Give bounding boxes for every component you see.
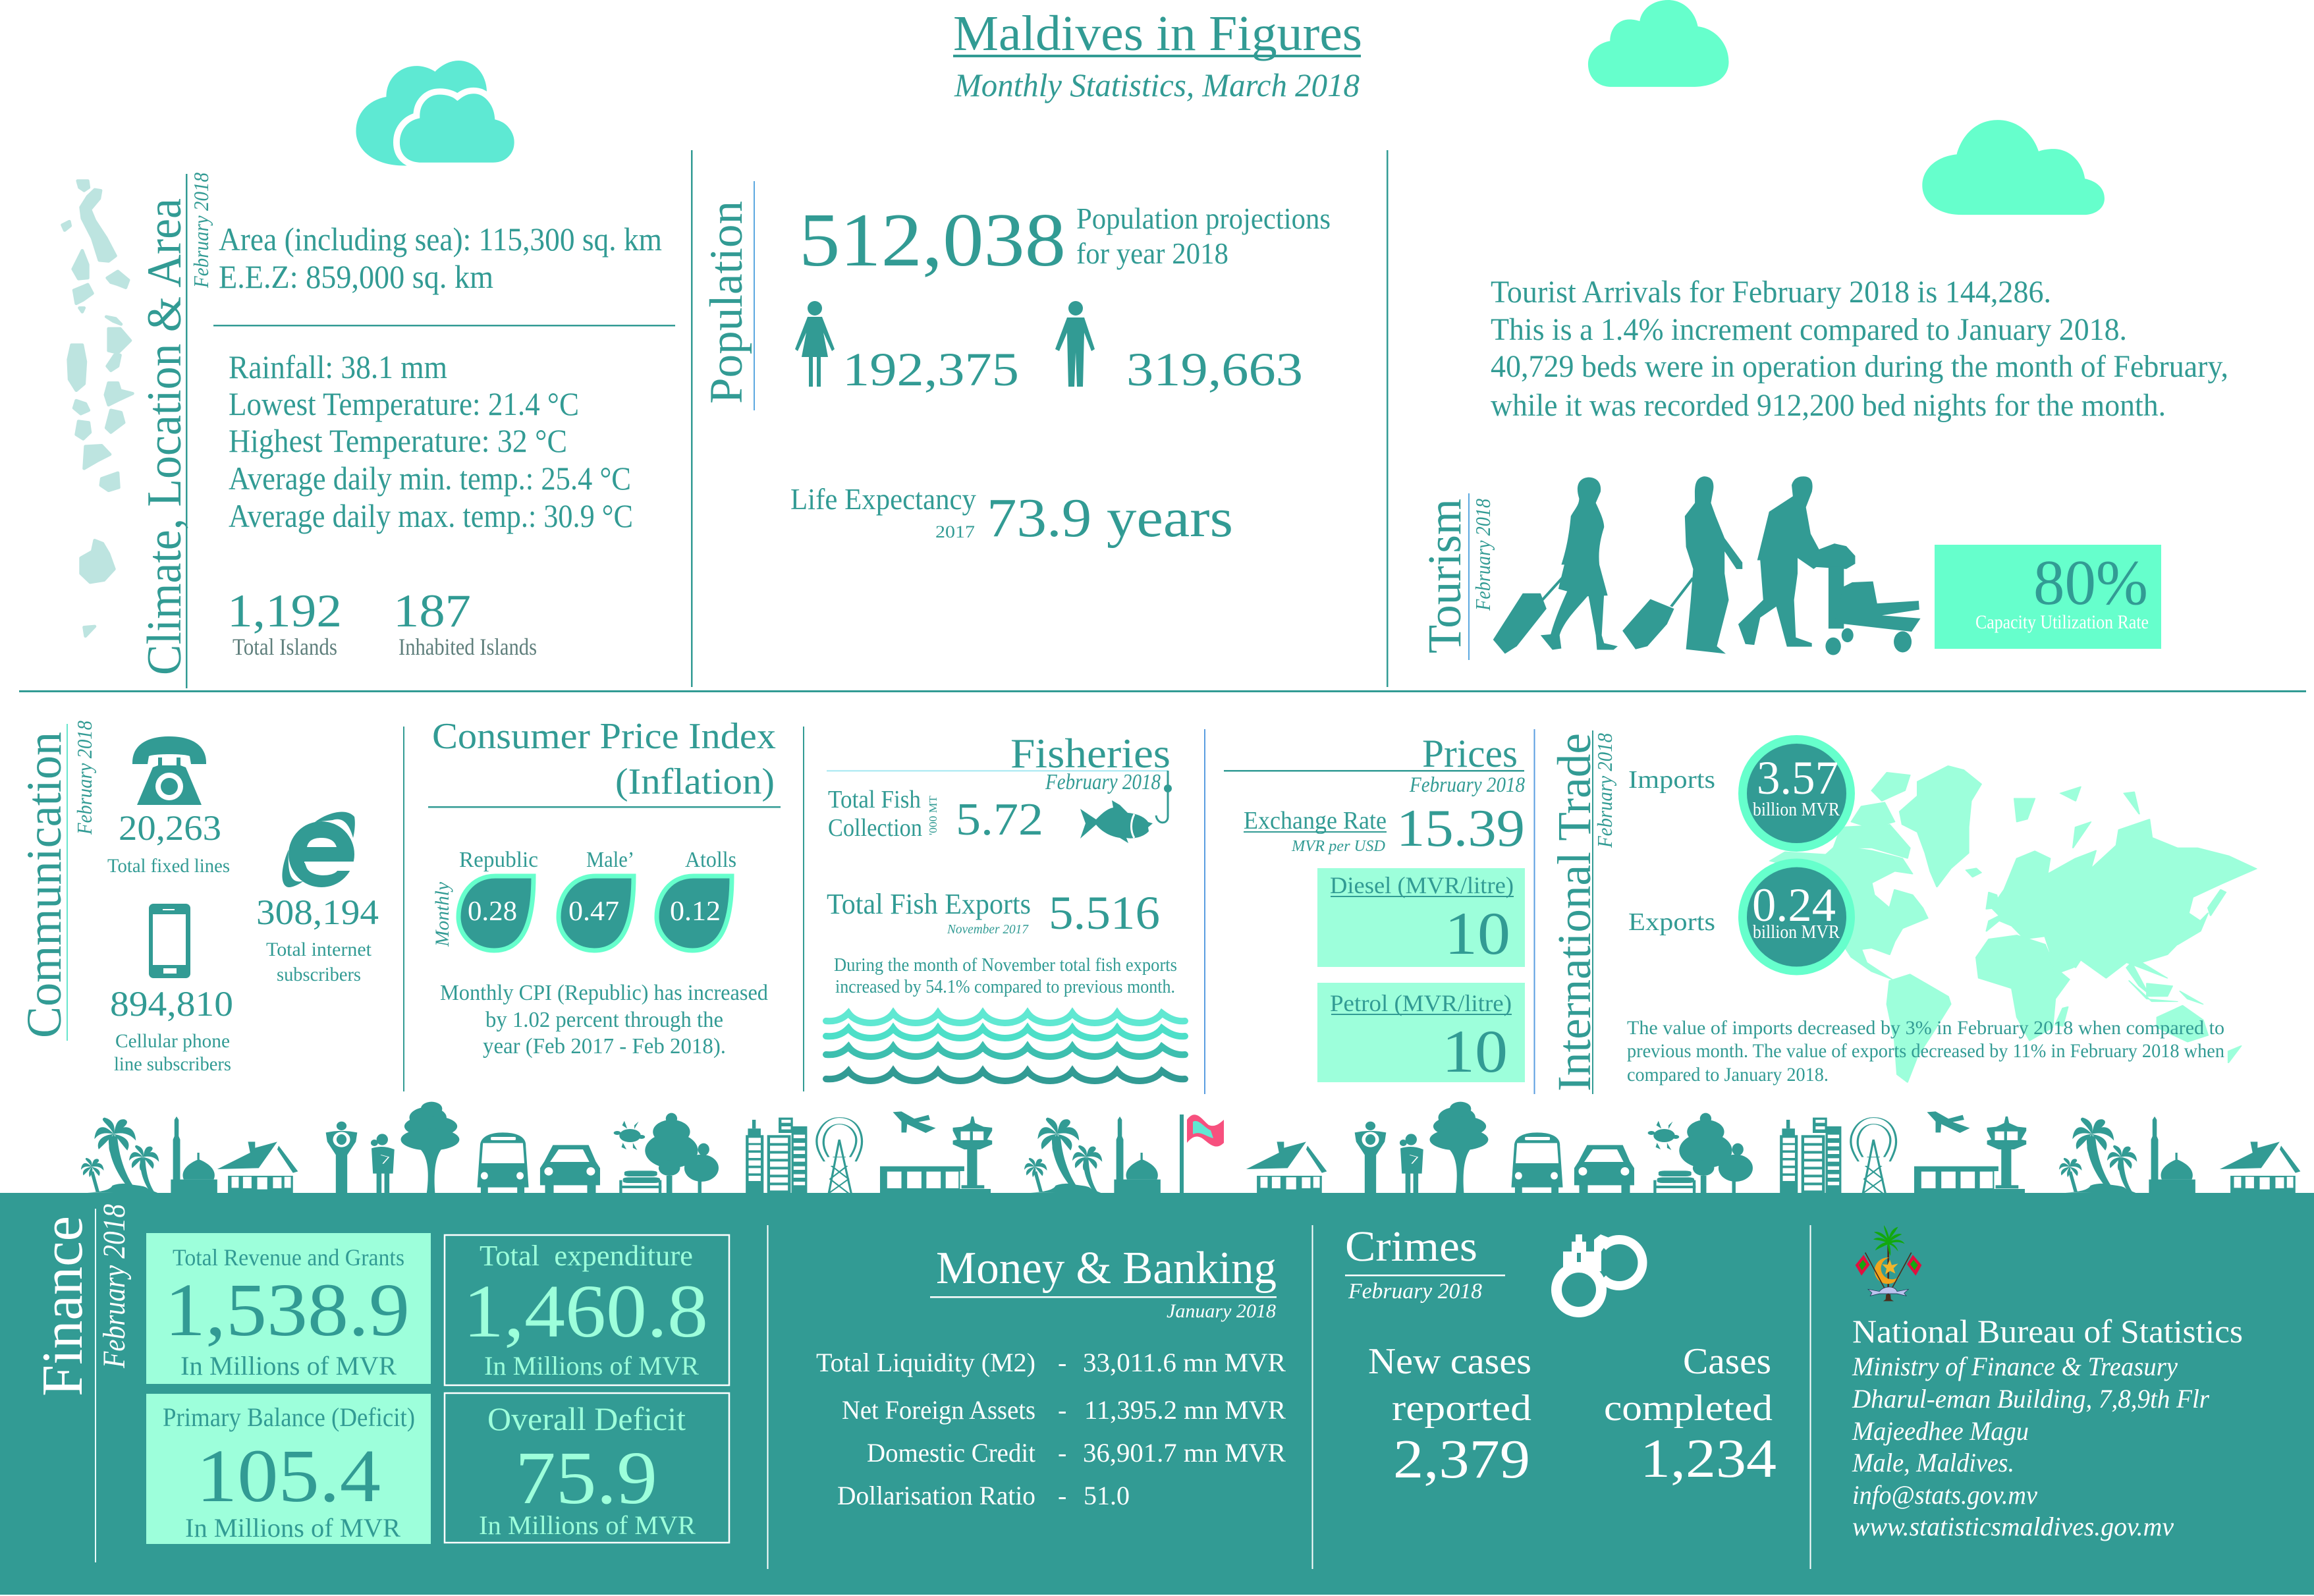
dollarisation ratio (837, 1481, 1130, 1510)
drop: atolls (657, 876, 732, 950)
heading: crimes: Crimes (1345, 1223, 1477, 1271)
area text: Area (including sea): 115,300 sq. km (219, 221, 662, 258)
internet subscribers: subscribers (277, 964, 361, 985)
date: February 2018 (1045, 770, 1161, 794)
CPI note: year (Feb 2017 - Feb 2018). (483, 1034, 726, 1059)
net foreign assets: Net Foreign Assets (842, 1395, 1035, 1425)
heading: population: Population (701, 201, 752, 404)
life expectancy (790, 482, 1233, 549)
waves (826, 1013, 1185, 1081)
exchange rate: Exchange Rate (1244, 807, 1387, 835)
icon: mobile phone (149, 904, 190, 978)
new cases: New cases (1368, 1341, 1531, 1382)
dollarisation ratio: - (1058, 1481, 1066, 1510)
trade note (1627, 1017, 2224, 1086)
palms and mosque (2059, 1116, 2195, 1194)
house, people and tree (217, 1102, 459, 1194)
climate text: Rainfall: 38.1 mm (229, 348, 447, 385)
date: February 2018 (1409, 773, 1525, 797)
date: February 2018 (189, 173, 213, 289)
trade note: compared to January 2018. (1627, 1064, 1829, 1086)
climate text (229, 348, 633, 534)
island counts: Inhabited Islands (399, 634, 537, 660)
heading: climate: Climate, Location & Area (138, 198, 192, 675)
area text: E.E.Z: 859,000 sq. km (219, 258, 493, 295)
panel: climate, location and area (63, 173, 675, 688)
internet subscribers (256, 893, 379, 985)
contact details: www.statisticsmaldives.gov.mv (1852, 1512, 2174, 1541)
domestic credit (867, 1438, 1286, 1468)
capacity utilization box: Capacity Utilization Rate (1975, 611, 2149, 633)
exports circle: 0.24 (1752, 879, 1836, 931)
area text (219, 221, 662, 295)
net foreign assets: 11,395.2 mn MVR (1084, 1395, 1286, 1425)
petrol box: 10 (1442, 1018, 1508, 1085)
CPI note: Monthly CPI (Republic) has increased (440, 981, 768, 1005)
climate text: Lowest Temperature: 21.4 °C (229, 385, 579, 422)
tourism text: 40,729 beds were in operation during the month of February, (1491, 349, 2228, 384)
palms and mosque (81, 1116, 217, 1194)
cases completed: 1,234 (1640, 1428, 1777, 1489)
CPI note (440, 981, 768, 1059)
box: primary balance (146, 1394, 431, 1544)
box: expenditure: 1,460.8 (463, 1269, 708, 1353)
petrol box: Petrol (MVR/litre) (1330, 990, 1512, 1016)
box: expenditure: In Millions of MVR (484, 1351, 699, 1381)
box: expenditure (445, 1235, 729, 1385)
capacity utilization box (1935, 545, 2161, 649)
box: revenue (146, 1233, 431, 1384)
drop: male: 0.47 (568, 896, 619, 927)
fish exports: Total Fish Exports (827, 888, 1031, 920)
heading: CPI: Consumer Price Index (432, 716, 776, 757)
panel: population (701, 181, 1331, 549)
date: February 2018 (1348, 1279, 1482, 1304)
life expectancy: Life Expectancy (790, 482, 976, 516)
box: primary balance: Primary Balance (Deficit) (163, 1402, 415, 1432)
world map (1770, 766, 2257, 1082)
cellular subscribers: Cellular phone (115, 1030, 230, 1052)
icon: double cloud (356, 61, 518, 165)
subtitle: Monthly Statistics, March 2018 (954, 67, 1360, 103)
heading: CPI (432, 716, 776, 802)
fish note: During the month of November total fish exports (834, 954, 1177, 976)
tourism text: while it was recorded 912,200 bed nights for the month. (1491, 388, 2166, 423)
fish note (834, 954, 1177, 997)
cases completed (1604, 1341, 1777, 1489)
internet subscribers: Total internet (266, 939, 372, 960)
vehicles, buildings and tower (1511, 1111, 2026, 1195)
island counts: 1,192 (227, 586, 342, 637)
contact details (1852, 1352, 2209, 1541)
map of Maldives islands (63, 181, 132, 636)
total liquidity: Total Liquidity (M2) (816, 1348, 1035, 1377)
title block (953, 6, 1362, 103)
drop: atolls: 0.12 (670, 896, 721, 927)
panel: money and banking (816, 1243, 1286, 1510)
total liquidity (816, 1348, 1286, 1377)
icon: female (795, 301, 835, 387)
exchange rate: 15.39 (1396, 800, 1525, 858)
panel: finance (31, 1204, 729, 1562)
icon: handcuffs (1556, 1234, 1642, 1312)
new cases: 2,379 (1393, 1429, 1530, 1490)
title: Maldives in Figures (953, 6, 1362, 61)
exports label: Exports (1628, 908, 1715, 936)
new cases (1368, 1341, 1531, 1490)
fish collection label (828, 786, 939, 842)
panel: footer band (0, 1193, 2314, 1595)
panel: crimes (1345, 1223, 1777, 1490)
climate text: Average daily min. temp.: 25.4 °C (229, 460, 631, 497)
cellular subscribers (110, 984, 233, 1075)
house, people and tree (1246, 1102, 1488, 1194)
panel: communication (17, 721, 379, 1075)
fish exports (827, 887, 1160, 939)
exchange rate (1244, 800, 1525, 858)
projection note (1076, 202, 1331, 270)
net foreign assets (842, 1395, 1286, 1425)
icon: Maldives flag (1180, 1114, 1224, 1194)
fixed lines (107, 808, 230, 877)
cases completed: completed (1604, 1388, 1773, 1429)
drop: republic: 0.28 (468, 896, 517, 927)
domestic credit: Domestic Credit (867, 1438, 1035, 1468)
skyline illustration (81, 1102, 2300, 1195)
box: overall deficit (445, 1393, 729, 1543)
imports circle (1743, 739, 1851, 847)
travellers silhouettes (1493, 476, 1921, 655)
heading: CPI: (Inflation) (615, 761, 775, 802)
panel: international trade (1548, 730, 2257, 1094)
date: February 2018 (1471, 499, 1495, 611)
fixed lines: 20,263 (119, 808, 221, 848)
fish note: increased by 54.1% compared to previous month. (835, 976, 1175, 997)
date: February 2018 (97, 1204, 132, 1369)
icon: cloud top (1588, 0, 1728, 87)
projection note: Population projections (1076, 202, 1331, 235)
cellular subscribers: line subscribers (114, 1053, 231, 1075)
total liquidity: 33,011.6 mn MVR (1083, 1348, 1286, 1377)
panel: national bureau of statistics (1852, 1225, 2243, 1541)
trade note: The value of imports decreased by 3% in February 2018 when compared to (1627, 1017, 2224, 1039)
panel: prices (1224, 732, 1525, 1085)
heading: communication: Communication (17, 732, 72, 1038)
imports circle: 3.57 (1757, 752, 1838, 804)
trade note: previous month. The value of exports decreased by 11% in February 2018 when (1627, 1040, 2224, 1062)
tourism text: This is a 1.4% increment compared to January 2018. (1491, 312, 2127, 347)
new cases: reported (1392, 1388, 1531, 1429)
box: primary balance: In Millions of MVR (185, 1513, 400, 1543)
contact details: info@stats.gov.mv (1852, 1480, 2037, 1510)
domestic credit: 36,901.7 mn MVR (1083, 1438, 1286, 1468)
drop: republic (458, 876, 534, 950)
net foreign assets: - (1058, 1395, 1066, 1425)
petrol box (1317, 983, 1525, 1085)
climate text: Highest Temperature: 32 °C (229, 422, 567, 459)
exports circle (1743, 863, 1851, 971)
exports circle: billion MVR (1753, 922, 1840, 943)
panel: fisheries (826, 730, 1185, 1081)
drop: male (559, 876, 634, 950)
life expectancy: 73.9 years (987, 487, 1233, 549)
box: revenue: In Millions of MVR (180, 1351, 397, 1381)
diesel box (1317, 868, 1525, 967)
heading: fisheries: Fisheries (1010, 730, 1171, 777)
CPI labels (459, 848, 736, 872)
island counts (227, 586, 537, 660)
diesel box: 10 (1445, 900, 1510, 967)
panel: consumer price index (428, 716, 781, 1059)
icon: fish and hook (1080, 771, 1172, 843)
monthly label: Monthly (431, 881, 453, 947)
CPI note: by 1.02 percent through the (485, 1008, 723, 1032)
contact details: Majeedhee Magu (1852, 1416, 2029, 1446)
heading: money and banking: Money & Banking (936, 1243, 1277, 1294)
heading: international trade: International Trade (1548, 733, 1601, 1091)
climate text: Average daily max. temp.: 30.9 °C (229, 497, 633, 534)
dollarisation ratio: 51.0 (1084, 1481, 1130, 1510)
exchange rate: MVR per USD (1291, 838, 1385, 855)
total population: 512,038 (799, 198, 1066, 283)
fish collection value: 5.72 (956, 794, 1043, 845)
CPI labels: Republic (459, 848, 538, 872)
life expectancy: 2017 (935, 522, 975, 541)
cellular subscribers: 894,810 (110, 984, 233, 1024)
contact details: Male, Maldives. (1852, 1448, 2014, 1477)
date: January 2018 (1167, 1300, 1276, 1322)
total liquidity: - (1058, 1348, 1066, 1377)
capacity utilization box: 80% (2033, 547, 2148, 619)
contact details: Dharul-eman Building, 7,8,9th Flr (1852, 1384, 2209, 1414)
title underline (953, 55, 1361, 57)
icon: national emblem (1856, 1225, 1921, 1301)
heading: tourism: Tourism (1418, 499, 1471, 653)
last house (2220, 1142, 2300, 1194)
box: expenditure: Total expenditure (480, 1240, 693, 1272)
dollarisation ratio: Dollarisation Ratio (837, 1481, 1035, 1510)
CPI labels: Atolls (685, 848, 736, 872)
fish exports: November 2017 (947, 922, 1029, 937)
vehicles, buildings and tower (477, 1111, 992, 1195)
imports circle: billion MVR (1753, 800, 1840, 820)
internet subscribers: 308,194 (256, 893, 379, 932)
island counts: Total Islands (233, 634, 337, 660)
CPI labels: Male’ (586, 848, 634, 872)
tourism text (1491, 275, 2228, 423)
male count: 319,663 (1126, 343, 1303, 396)
box: revenue: 1,538.9 (165, 1268, 410, 1352)
domestic credit: - (1058, 1438, 1066, 1468)
fish collection label: Total Fish (828, 786, 921, 813)
icon: cloud right (1922, 120, 2105, 215)
fixed lines: Total fixed lines (107, 855, 230, 877)
box: overall deficit: 75.9 (515, 1436, 657, 1520)
contact details: Ministry of Finance & Treasury (1852, 1352, 2178, 1381)
cases completed: Cases (1683, 1341, 1771, 1382)
box: overall deficit: In Millions of MVR (479, 1510, 696, 1540)
heading: NBS: National Bureau of Statistics (1852, 1313, 2243, 1350)
fish collection label: '000 MT (927, 795, 939, 835)
box: revenue: Total Revenue and Grants (173, 1244, 404, 1271)
icon: male (1055, 301, 1095, 387)
date: February 2018 (1593, 733, 1616, 848)
icon: telephone (132, 736, 206, 805)
imports label: Imports (1628, 766, 1715, 794)
fish exports: 5.516 (1049, 887, 1160, 939)
tourism text: Tourist Arrivals for February 2018 is 144,286. (1491, 275, 2051, 310)
heading: prices: Prices (1422, 732, 1518, 775)
box: overall deficit: Overall Deficit (487, 1400, 686, 1437)
icon: internet e (282, 812, 357, 887)
island counts: 187 (393, 586, 471, 637)
fish collection label: Collection (828, 814, 922, 842)
palms and mosque (1024, 1116, 1161, 1194)
female count: 192,375 (842, 343, 1019, 396)
date: February 2018 (72, 721, 96, 835)
box: primary balance: 105.4 (196, 1434, 381, 1518)
heading: finance: Finance (31, 1216, 95, 1396)
panel: tourism (1418, 275, 2228, 660)
projection note: for year 2018 (1076, 236, 1228, 270)
diesel box: Diesel (MVR/litre) (1330, 872, 1514, 898)
